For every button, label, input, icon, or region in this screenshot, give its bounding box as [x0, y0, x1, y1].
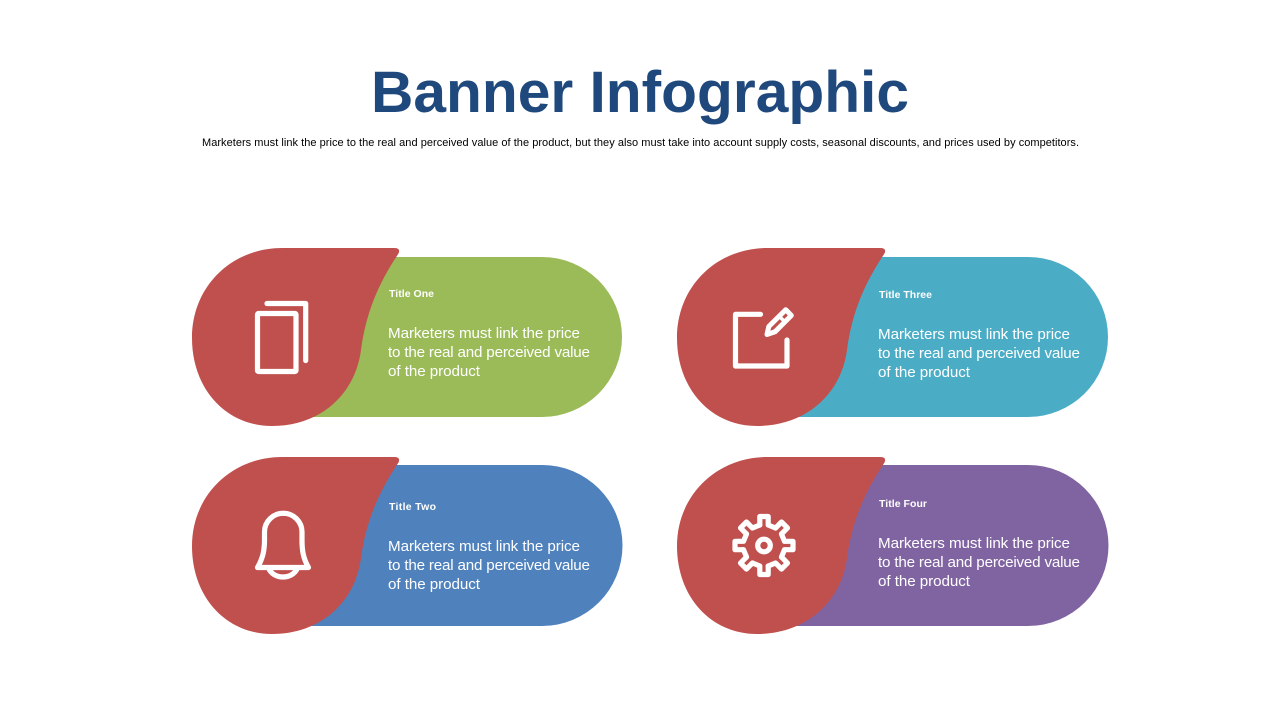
- panel: title four: [677, 457, 1108, 634]
- body text: title three: [878, 326, 1080, 381]
- title: Banner Infographic: [371, 60, 909, 125]
- icon: documents: [258, 304, 306, 372]
- red drop: [677, 457, 885, 634]
- body text: title four: Marketers must link the price: [878, 535, 1070, 552]
- red drop: [192, 457, 399, 634]
- body text: title one: to the real and perceived value: [388, 344, 590, 361]
- body text: title two: of the product: [388, 576, 481, 593]
- body text: title three: to the real and perceived value: [878, 345, 1080, 362]
- body text: title three: Marketers must link the price: [878, 326, 1070, 343]
- red drop: [677, 248, 885, 426]
- body text: title three: of the product: [878, 364, 971, 381]
- body text: title one: [388, 325, 590, 380]
- subtitle: Marketers must link the price to the real and perceived value of the product, but they also must take into account supply costs, seasonal discounts, and prices used by competitors.: [202, 137, 1079, 149]
- body text: title one: of the product: [388, 363, 481, 380]
- panel: title three: [677, 248, 1108, 426]
- green banner: [300, 257, 622, 417]
- icon: bell: [258, 513, 308, 577]
- body text: title two: [388, 538, 590, 593]
- body text: title two: Marketers must link the price: [388, 538, 580, 555]
- body text: title four: [878, 535, 1080, 590]
- panel: title two: [192, 457, 622, 634]
- icon: edit note: [736, 310, 791, 366]
- teal banner: [785, 257, 1108, 417]
- panel: title one: [192, 248, 622, 426]
- red drop: [192, 248, 399, 426]
- body text: title one: Marketers must link the price: [388, 325, 580, 342]
- body text: title two: to the real and perceived value: [388, 557, 590, 574]
- body text: title four: of the product: [878, 573, 971, 590]
- heading: title one: Title One: [389, 288, 434, 300]
- heading: title two: Title Two: [389, 501, 436, 513]
- heading: title three: Title Three: [879, 289, 932, 301]
- purple banner: [785, 465, 1108, 626]
- heading: title four: Title Four: [879, 498, 927, 510]
- blue banner: [300, 465, 622, 626]
- body text: title four: to the real and perceived value: [878, 554, 1080, 571]
- icon: gear: [735, 516, 793, 574]
